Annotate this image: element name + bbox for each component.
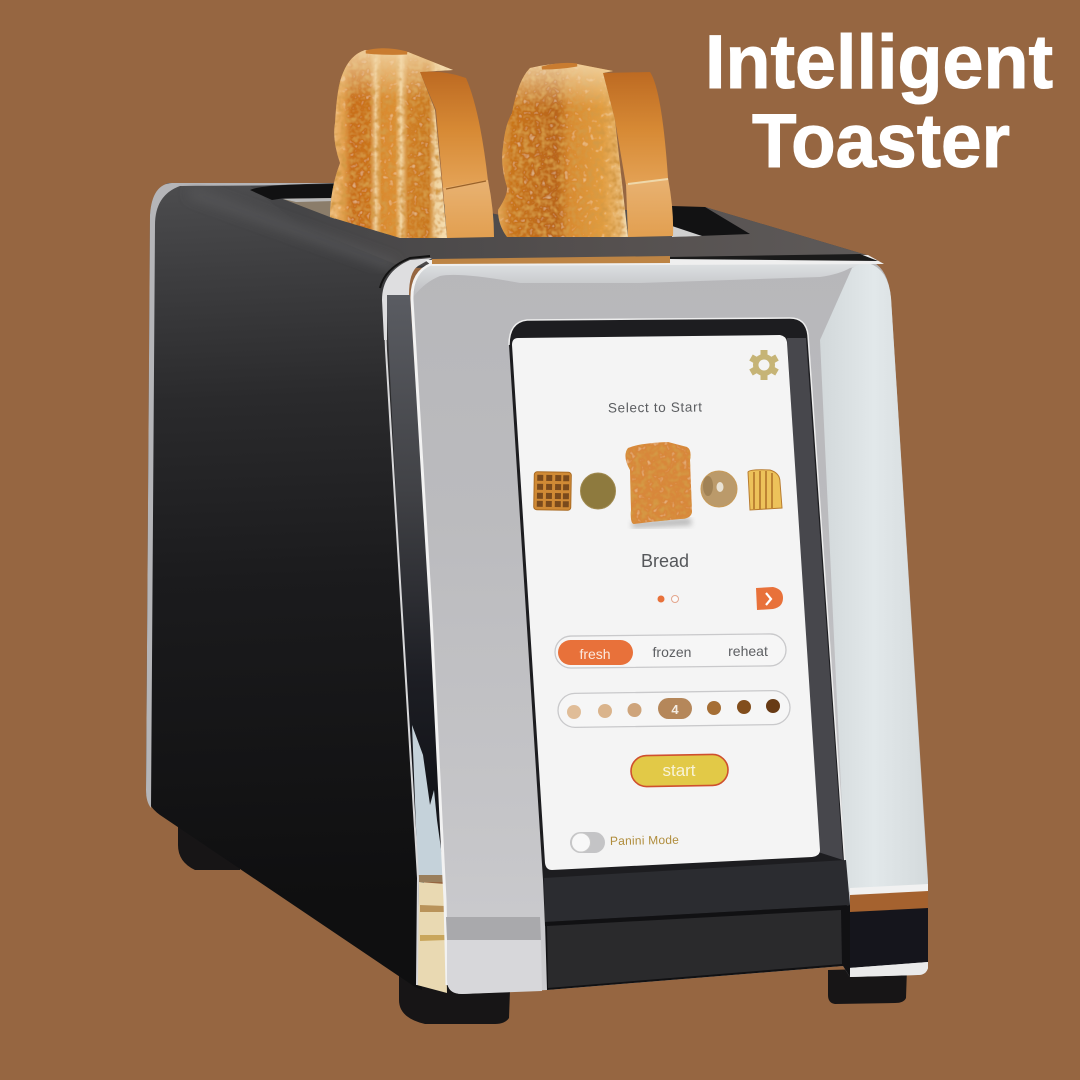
title <box>705 20 1053 184</box>
pagination dots <box>658 596 678 602</box>
mode selector <box>555 634 786 668</box>
bread slices <box>330 50 673 238</box>
panini mode toggle: Panini Mode <box>610 833 679 848</box>
left top pale <box>330 50 453 170</box>
lower chrome reflection <box>446 917 542 994</box>
right crust lower <box>626 178 673 237</box>
screen background <box>512 335 820 870</box>
rear slot <box>250 184 335 219</box>
left crust crack <box>446 181 486 189</box>
icon: english muffin <box>580 473 616 509</box>
title: Intelligent <box>705 20 1053 105</box>
right top crust spot <box>542 64 577 68</box>
icon: waffle <box>534 472 571 510</box>
right top pale <box>503 64 621 170</box>
title: Toaster <box>752 99 1010 184</box>
start button: start <box>662 761 696 780</box>
browning level selector <box>558 690 790 728</box>
fresh label: fresh <box>579 646 611 662</box>
level 4 pill <box>658 698 692 719</box>
front chrome face <box>412 260 928 994</box>
right crust upper <box>603 72 668 185</box>
control block below screen <box>544 860 850 922</box>
food carousel <box>534 442 782 528</box>
panini mode toggle <box>570 832 679 853</box>
strip tan reflection <box>417 875 447 993</box>
left edge highlight <box>146 183 340 808</box>
right slice <box>498 64 673 237</box>
reheat option: reheat <box>728 643 768 659</box>
bezel light rim <box>509 318 845 865</box>
settings gear icon <box>751 350 777 380</box>
left top crust spot <box>366 50 407 53</box>
left crust lower <box>443 180 494 238</box>
front slot <box>672 206 750 237</box>
top trim <box>425 254 884 266</box>
start button <box>631 754 728 787</box>
screen bezel <box>509 318 847 926</box>
fresh button <box>558 640 633 665</box>
toaster feet <box>178 824 907 1024</box>
lower right reflection <box>849 884 928 977</box>
shadow under bread <box>632 518 692 528</box>
lower lever panel <box>547 910 842 988</box>
strip upper arc <box>382 258 432 340</box>
black body silhouette <box>146 183 872 990</box>
frozen option: frozen <box>653 644 691 660</box>
bread label: Bread <box>641 551 689 571</box>
right crust crack <box>628 179 668 184</box>
left toasted face <box>330 50 453 238</box>
left slice <box>330 50 494 238</box>
next arrow button <box>756 587 783 610</box>
right toasted face <box>498 64 628 237</box>
left crust upper <box>420 72 488 189</box>
select to start label: Select to Start <box>608 400 702 415</box>
strip dark inlay <box>386 295 445 880</box>
lever panel surround <box>545 905 850 990</box>
strip left bright line <box>384 295 418 985</box>
strip blue reflection <box>412 725 445 878</box>
strip black rim <box>380 256 430 288</box>
chrome corner strip <box>380 256 447 993</box>
top surface <box>250 183 872 266</box>
icon: panini <box>748 470 782 510</box>
upper highlight band <box>414 262 868 296</box>
level 4 number: 4 <box>671 702 679 717</box>
toaster <box>146 183 928 1024</box>
chrome left bright edge <box>412 264 447 985</box>
side ridge highlight <box>190 192 395 266</box>
bezel textured side <box>787 338 843 860</box>
display screen <box>512 335 820 870</box>
bright right reflection <box>820 262 928 892</box>
icon: bread slice <box>625 442 692 524</box>
icon: bagel <box>701 471 737 507</box>
